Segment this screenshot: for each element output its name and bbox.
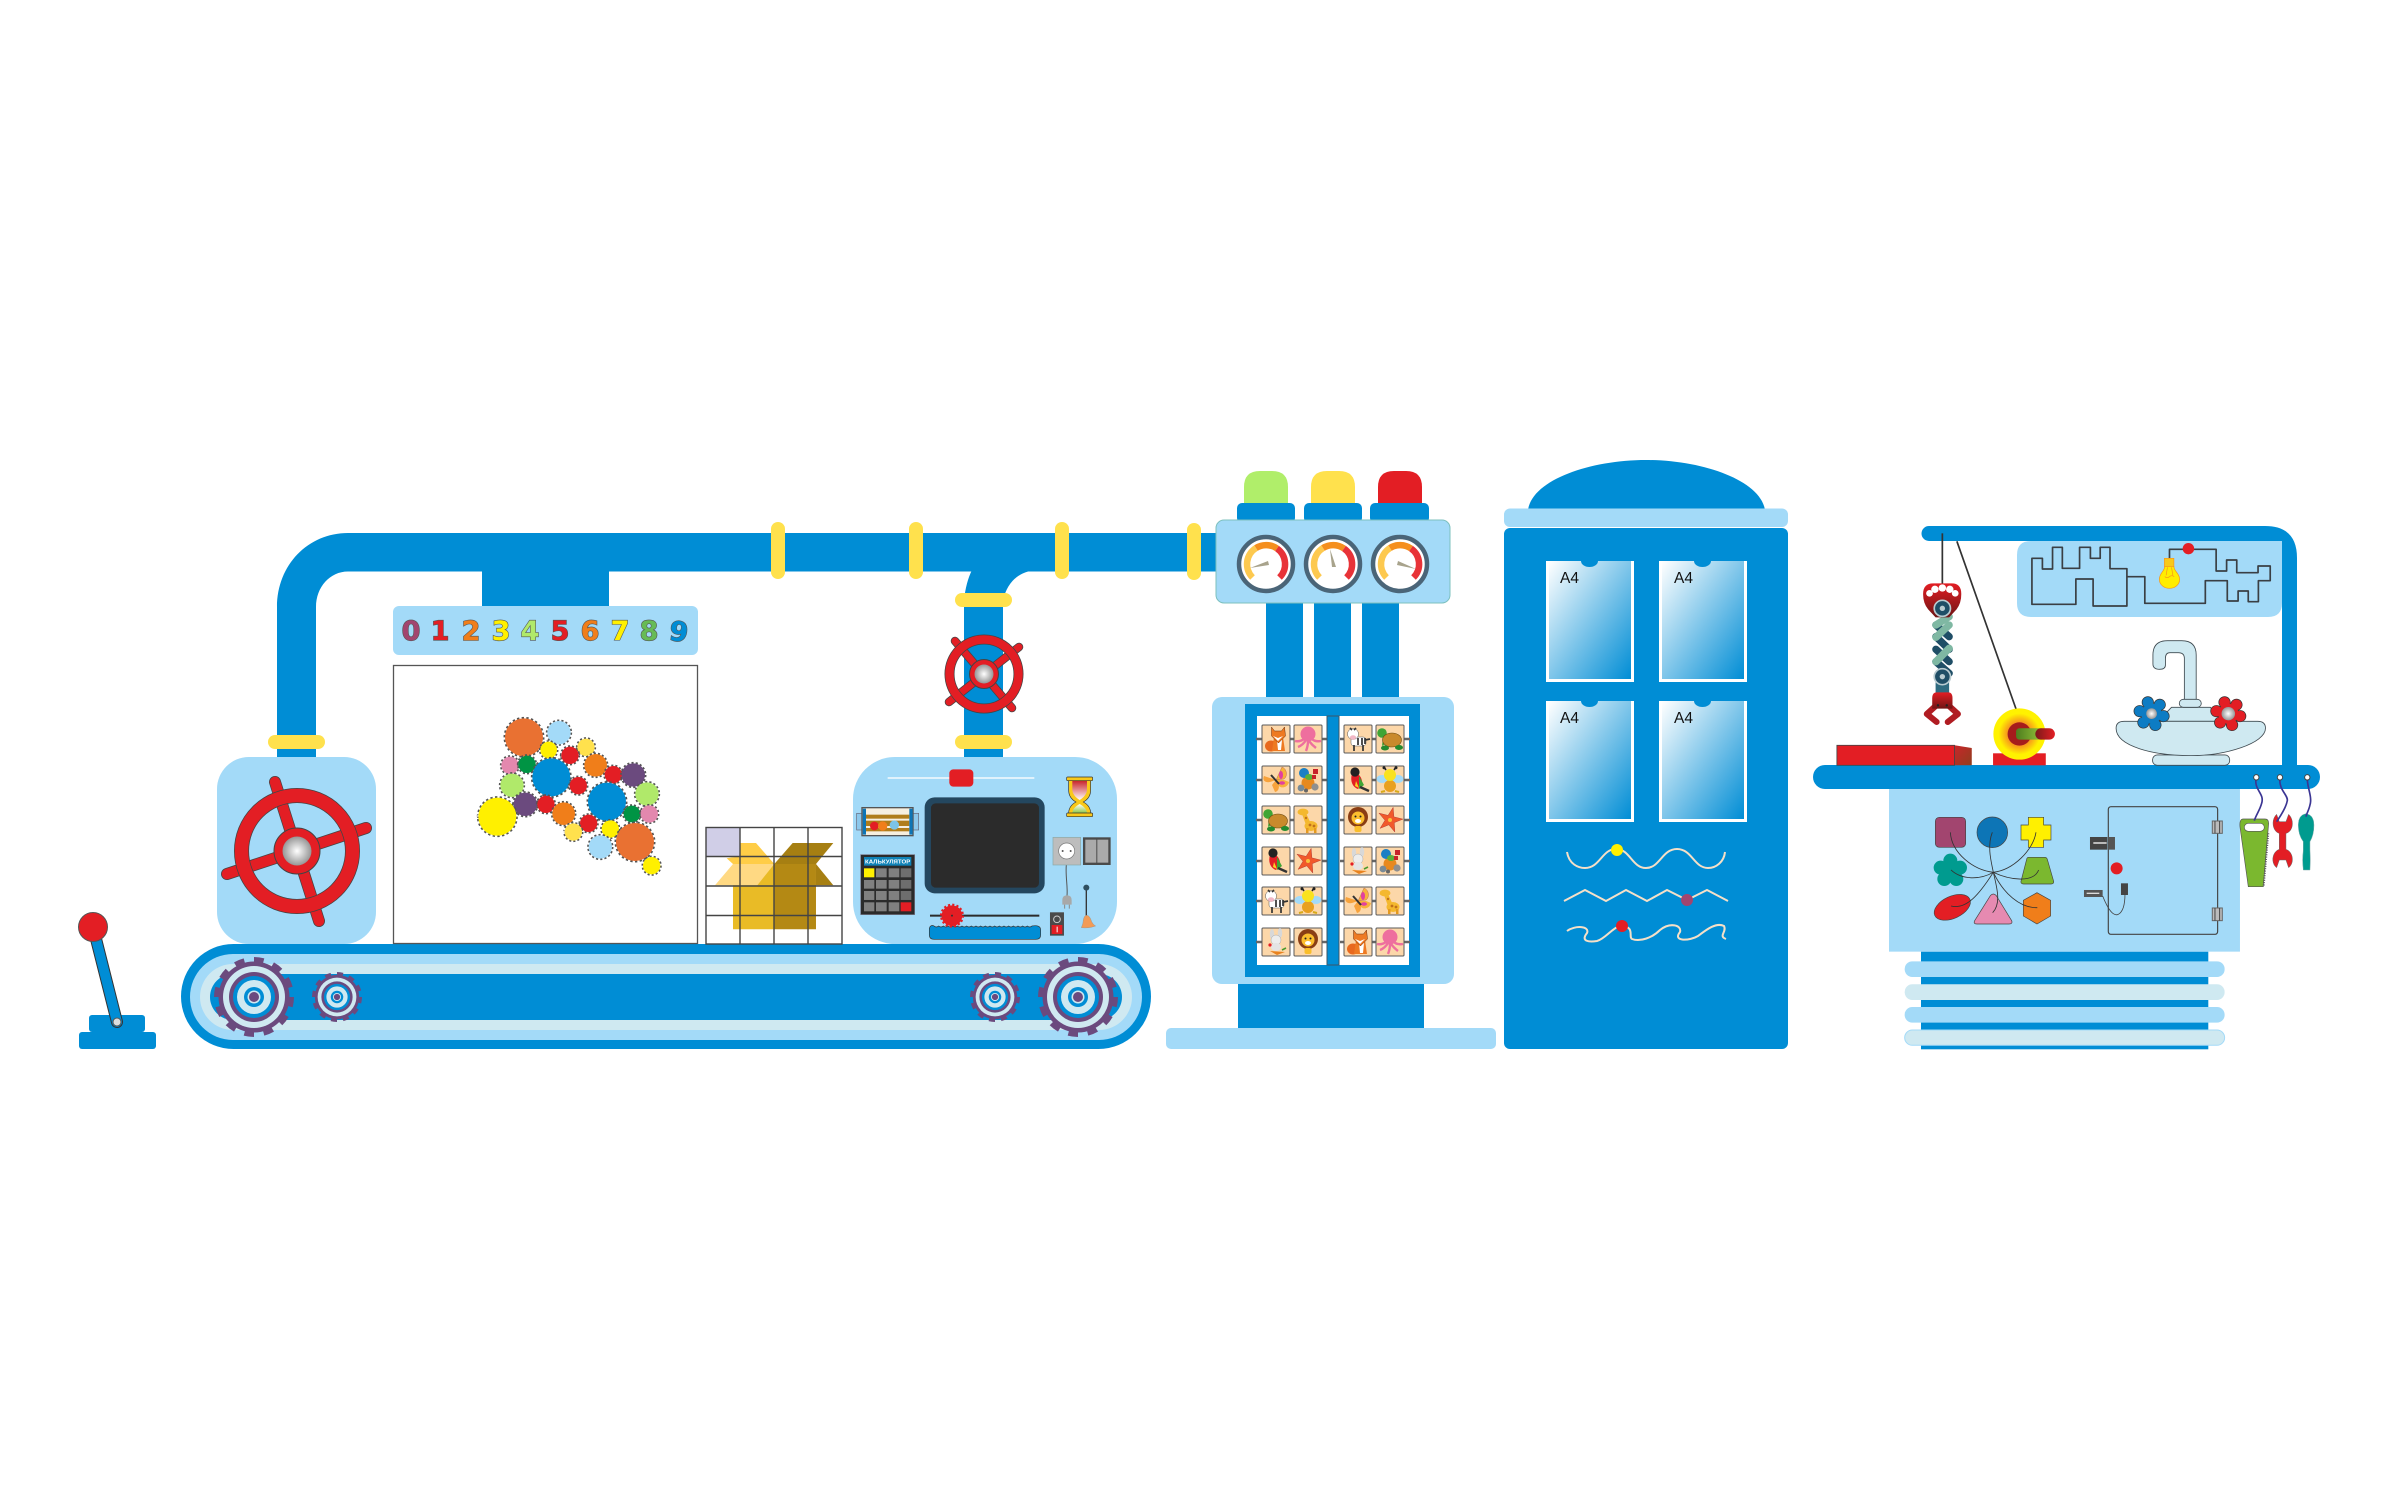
long cable to spinner	[1957, 541, 2016, 709]
panel: number strip	[393, 606, 698, 655]
clamp: left pipe	[268, 735, 325, 749]
hook screws	[2254, 775, 2310, 780]
upper frame beam	[1922, 526, 2297, 770]
icon: hourglass	[1067, 777, 1093, 817]
bench top	[1813, 765, 2320, 789]
icon: saw	[2240, 819, 2269, 887]
gauge 2	[1306, 537, 1360, 591]
icon: sink and faucet	[2116, 641, 2265, 765]
bead wire: squiggle	[1567, 920, 1726, 941]
icon: wrench	[2273, 814, 2292, 868]
gauge 1	[1239, 537, 1293, 591]
icon: valve wheel	[949, 640, 1019, 708]
icon: calculator: КАЛЬКУЛЯТОР	[865, 860, 911, 866]
icon: open cardboard box	[715, 843, 833, 929]
pocket A4 bottom left: A4	[1560, 710, 1579, 727]
lever	[78, 912, 156, 1049]
panel: control panel	[853, 757, 1117, 944]
panel: left tank with wheel	[217, 757, 376, 944]
small door	[2090, 807, 2222, 934]
clamps on the overhead pipe	[771, 522, 1201, 580]
icon: calculator	[861, 855, 915, 915]
panel: number strip: 0	[402, 616, 420, 647]
panel: animal matching board	[1212, 697, 1454, 984]
slider with red button	[888, 769, 1034, 787]
gear cluster	[478, 718, 660, 874]
gear: right small	[972, 974, 1018, 1020]
panel: workbench lower cabinet	[1889, 787, 2240, 1049]
icon: bell pull	[1081, 885, 1096, 928]
panel: number strip: 7	[611, 616, 629, 647]
pocket A4 bottom right	[1659, 701, 1747, 822]
pocket A4 top right	[1659, 561, 1747, 682]
gear: right large	[1040, 960, 1116, 1034]
panel: number strip: 5	[551, 616, 569, 647]
panel: number strip: 3	[492, 616, 510, 647]
icon: screwdriver	[2298, 814, 2314, 870]
cabinet top bar	[1504, 508, 1788, 527]
panel: grid with box puzzle	[706, 828, 842, 944]
panel: number strip: 4	[521, 616, 539, 647]
panel: gauges	[1216, 520, 1450, 603]
icon: red bead	[2183, 543, 2194, 554]
stripes on the base	[1905, 961, 2225, 1045]
panel: number strip: 8	[640, 616, 658, 647]
gear: left large	[216, 960, 292, 1034]
panel: number strip: 9	[667, 616, 690, 649]
pocket A4 bottom right: A4	[1674, 710, 1693, 727]
sorter wires	[1950, 832, 2039, 913]
pipe: stub to number panel	[482, 570, 609, 607]
icon: light switch	[1083, 837, 1111, 865]
base and floor	[1166, 980, 1496, 1049]
bead wire: zigzag	[1564, 890, 1728, 906]
gauge 3	[1373, 537, 1427, 591]
icon: light bulb	[2159, 558, 2180, 588]
tiles: animal pictures	[1262, 725, 1405, 956]
pipes below gauges	[1266, 600, 1399, 700]
hanging tools	[2240, 775, 2314, 887]
rack and pinion	[929, 905, 1041, 939]
bead wire: smooth wave	[1567, 844, 1725, 868]
panel: wire maze with bulb	[2017, 541, 2282, 617]
pocket A4 bottom left	[1546, 701, 1634, 822]
pipe: main overhead pipe	[277, 533, 1220, 760]
workbench top toys	[1837, 533, 2265, 765]
pipe: branch down to control panel	[964, 570, 1037, 760]
gear: left small	[314, 974, 360, 1020]
conveyor belt	[181, 944, 1151, 1049]
icon: abacus	[857, 808, 919, 836]
pocket A4 top left	[1546, 561, 1634, 682]
icon: spinner toy	[1993, 708, 2055, 765]
icon: red tap knob	[2207, 694, 2249, 733]
monitor	[925, 797, 1045, 893]
icon: red wheel	[227, 782, 366, 921]
icon: socket and plug	[1053, 837, 1081, 909]
signal caps	[1237, 471, 1429, 523]
door latch wire	[2084, 883, 2128, 915]
pocket A4 top left: A4	[1560, 570, 1579, 587]
icon: rocker switch	[1050, 912, 1064, 936]
shape sorter	[1930, 817, 2054, 925]
clamps on the branch pipe	[955, 593, 1012, 749]
crane cable	[1940, 533, 1945, 585]
panel: number strip: 6	[581, 616, 599, 647]
panel: number strip: 1	[431, 616, 449, 647]
icon: blue tap knob	[2131, 694, 2172, 733]
pocket A4 top right: A4	[1674, 570, 1693, 587]
panel: number strip: 2	[462, 616, 480, 647]
red box	[1837, 745, 1972, 765]
hook strings	[2254, 777, 2311, 822]
panel: blue cabinet	[1504, 460, 1788, 1049]
icon: crane claw	[1923, 583, 1961, 722]
panel: white gear board	[394, 666, 698, 944]
cabinet dome	[1528, 460, 1765, 510]
